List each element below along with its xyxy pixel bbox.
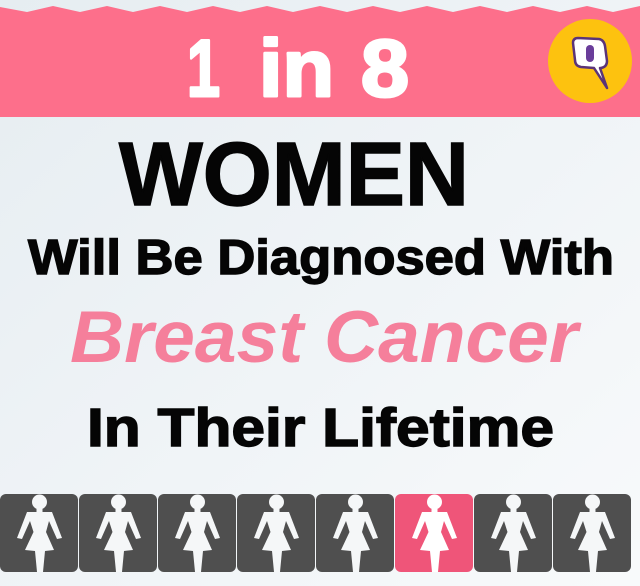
logo badge bbox=[548, 19, 632, 103]
icon: woman 8 bbox=[553, 494, 631, 572]
icon: woman 4 bbox=[237, 494, 315, 572]
banner headline: 8 bbox=[361, 24, 409, 114]
top banner bbox=[0, 6, 640, 117]
icon: woman 6 highlighted bbox=[395, 494, 473, 572]
text: will be diagnosed with: Will Be Diagnosed With bbox=[28, 231, 614, 285]
banner headline: in bbox=[259, 24, 334, 114]
heading: women: WOMEN bbox=[119, 125, 469, 225]
banner headline: 1 bbox=[187, 24, 220, 114]
icon: woman 7 bbox=[474, 494, 552, 572]
icon: woman 2 bbox=[79, 494, 157, 572]
banner headline bbox=[187, 24, 409, 114]
icon: woman 1 bbox=[0, 494, 78, 572]
text: in their lifetime: In Their Lifetime bbox=[87, 398, 554, 458]
pictogram row: 1 in 8 women bbox=[0, 494, 631, 572]
icon: woman 5 bbox=[316, 494, 394, 572]
heading: breast cancer: Breast Cancer bbox=[70, 297, 582, 378]
icon: woman 3 bbox=[158, 494, 236, 572]
